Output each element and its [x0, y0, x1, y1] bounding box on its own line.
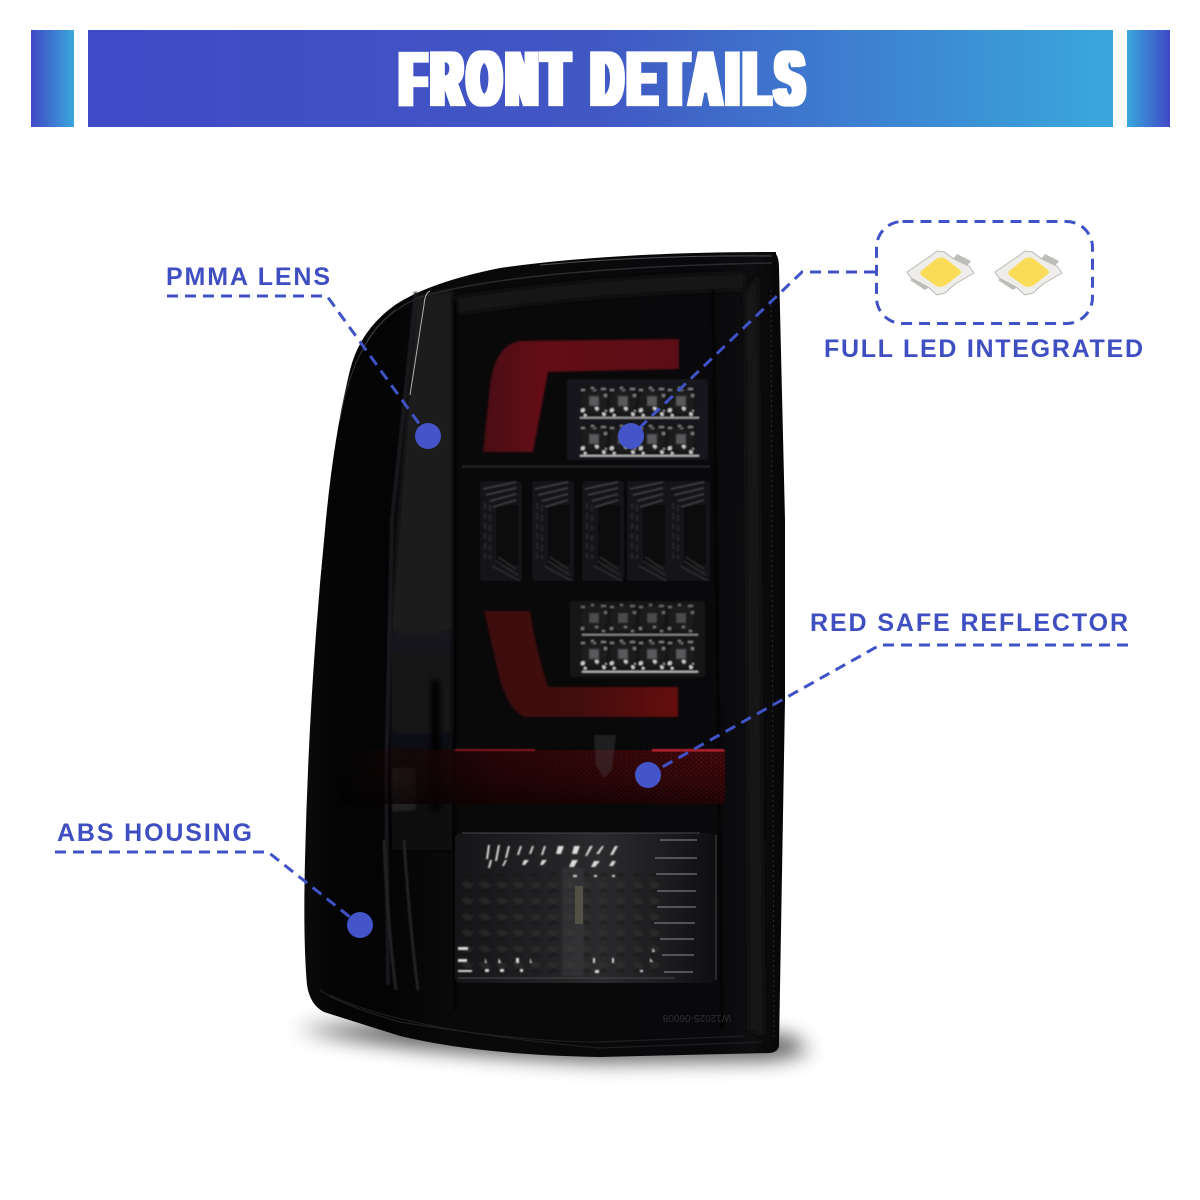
lens glints: [458, 845, 655, 973]
left accent block: [31, 30, 74, 127]
icon: LED chip left: [907, 251, 974, 295]
upper red light bar: [483, 339, 679, 452]
title: FRONT DETAILS: [400, 37, 804, 122]
part number: W12025-06008: [662, 1012, 731, 1023]
callout: PMMA lens: [166, 263, 441, 449]
icon: LED chip right: [995, 251, 1062, 295]
callout: red safe reflector: [635, 609, 1128, 788]
top edge highlights: [365, 263, 772, 345]
callout: full LED integrated: [618, 222, 1143, 449]
callout: ABS housing: ABS HOUSING: [57, 819, 252, 847]
upper LED module: [567, 379, 708, 460]
lower red light bar: [484, 611, 678, 717]
lens horizontal ribs: [654, 840, 697, 972]
reverse lens: [455, 833, 716, 983]
dark vertical gap: [431, 680, 440, 810]
ground shadow: [295, 1022, 810, 1062]
left grey lens band: [389, 290, 452, 850]
marker: [618, 423, 644, 449]
left light pipe highlight: [410, 291, 430, 395]
right outer frame speckle: [771, 290, 774, 1040]
lens reflection patch: [392, 768, 416, 812]
top inner grey band: [456, 273, 745, 314]
divider bar: [462, 465, 710, 468]
inner frame: [455, 290, 722, 1030]
label: FULL LED INTEGRATED: [824, 335, 1143, 363]
lamp body: [304, 252, 785, 1057]
callout: ABS housing: [55, 819, 373, 938]
right accent block: [1127, 30, 1170, 127]
main title bar: [88, 30, 1113, 127]
tail light illustration: [295, 252, 810, 1062]
right grey frame: [745, 275, 764, 1036]
lower light pipe strips: [384, 840, 418, 990]
header banner: [31, 30, 1170, 127]
callout: red safe reflector: RED SAFE REFLECTOR: [810, 609, 1128, 637]
clear lens blocks: [480, 481, 710, 581]
lower LED module: [570, 601, 705, 677]
red reflector: [384, 735, 725, 804]
bottom trim lines: [320, 990, 762, 1048]
callout: PMMA lens: PMMA LENS: [166, 263, 330, 291]
LED chip frame: [876, 222, 1092, 324]
leader line: [631, 272, 875, 436]
